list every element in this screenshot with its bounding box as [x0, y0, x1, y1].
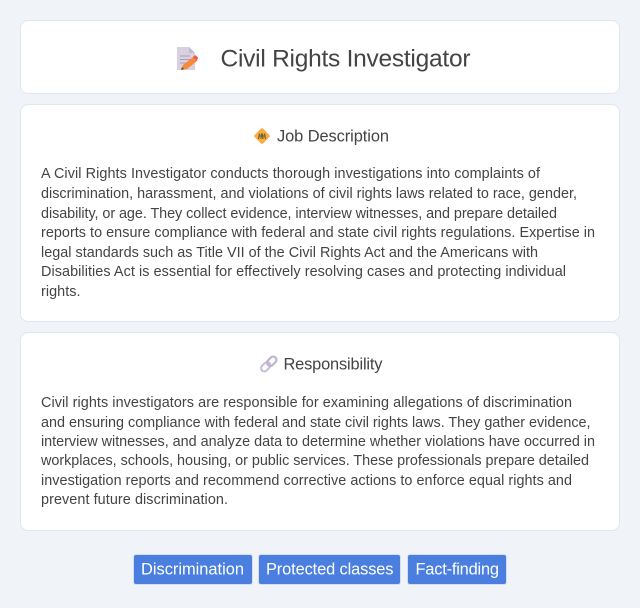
job description text: A Civil Rights Investigator conducts thorough investigations into complaints of: [41, 166, 541, 182]
heading: job description: Job Description: [277, 128, 389, 146]
heading: responsibility: Responsibility: [284, 356, 383, 374]
responsibility text: prevent future discrimination.: [41, 492, 228, 508]
job description text: [41, 166, 595, 300]
responsibility text: interview witnesses, and analyze data to determine whether violations have occurred in: [41, 434, 595, 450]
tag background: Fact-finding: [407, 554, 507, 585]
tag: Fact-finding: Fact-finding: [416, 560, 499, 578]
icon: road sign diamond: [254, 128, 270, 144]
job description text: disability, or age. They collect evidence, interview witnesses, and prepare detailed: [41, 206, 557, 222]
panel: job description card: [20, 104, 620, 322]
responsibility text: [40, 395, 595, 508]
panel: title card: [20, 20, 620, 94]
job description text: rights.: [41, 284, 80, 300]
job description text: discrimination, harassment, and violations of civil rights laws related to race, gender,: [41, 186, 577, 202]
tag background: Protected classes: [258, 554, 401, 585]
responsibility text: workplaces, schools, housing, or public services. These professionals prepare detailed: [40, 453, 589, 469]
title: Civil Rights Investigator: [220, 46, 470, 72]
responsibility text: investigation reports and recommend corrective actions to enforce equal rights and: [41, 473, 572, 489]
responsibility text: Civil rights investigators are responsible for examining allegations of discrimination: [41, 395, 572, 411]
job description text: reports to ensure compliance with federal and state civil rights regulations. Expertise in: [41, 225, 595, 241]
icon: chain link: [260, 355, 278, 373]
tag background: Discrimination: [133, 554, 253, 585]
job description text: Disabilities Act is essential for effectively resolving cases and protecting individual: [41, 264, 566, 280]
job description text: legal standards such as Title VII of the Civil Rights Act and the Americans with: [41, 245, 538, 261]
tag: Protected classes: Protected classes: [266, 560, 394, 578]
responsibility text: and ensuring compliance with federal and state civil rights laws. They gather evidence,: [41, 415, 590, 431]
tag: Discrimination: Discrimination: [141, 560, 244, 578]
icon: document with pencil: [177, 47, 198, 70]
panel: responsibility card: [20, 332, 620, 531]
